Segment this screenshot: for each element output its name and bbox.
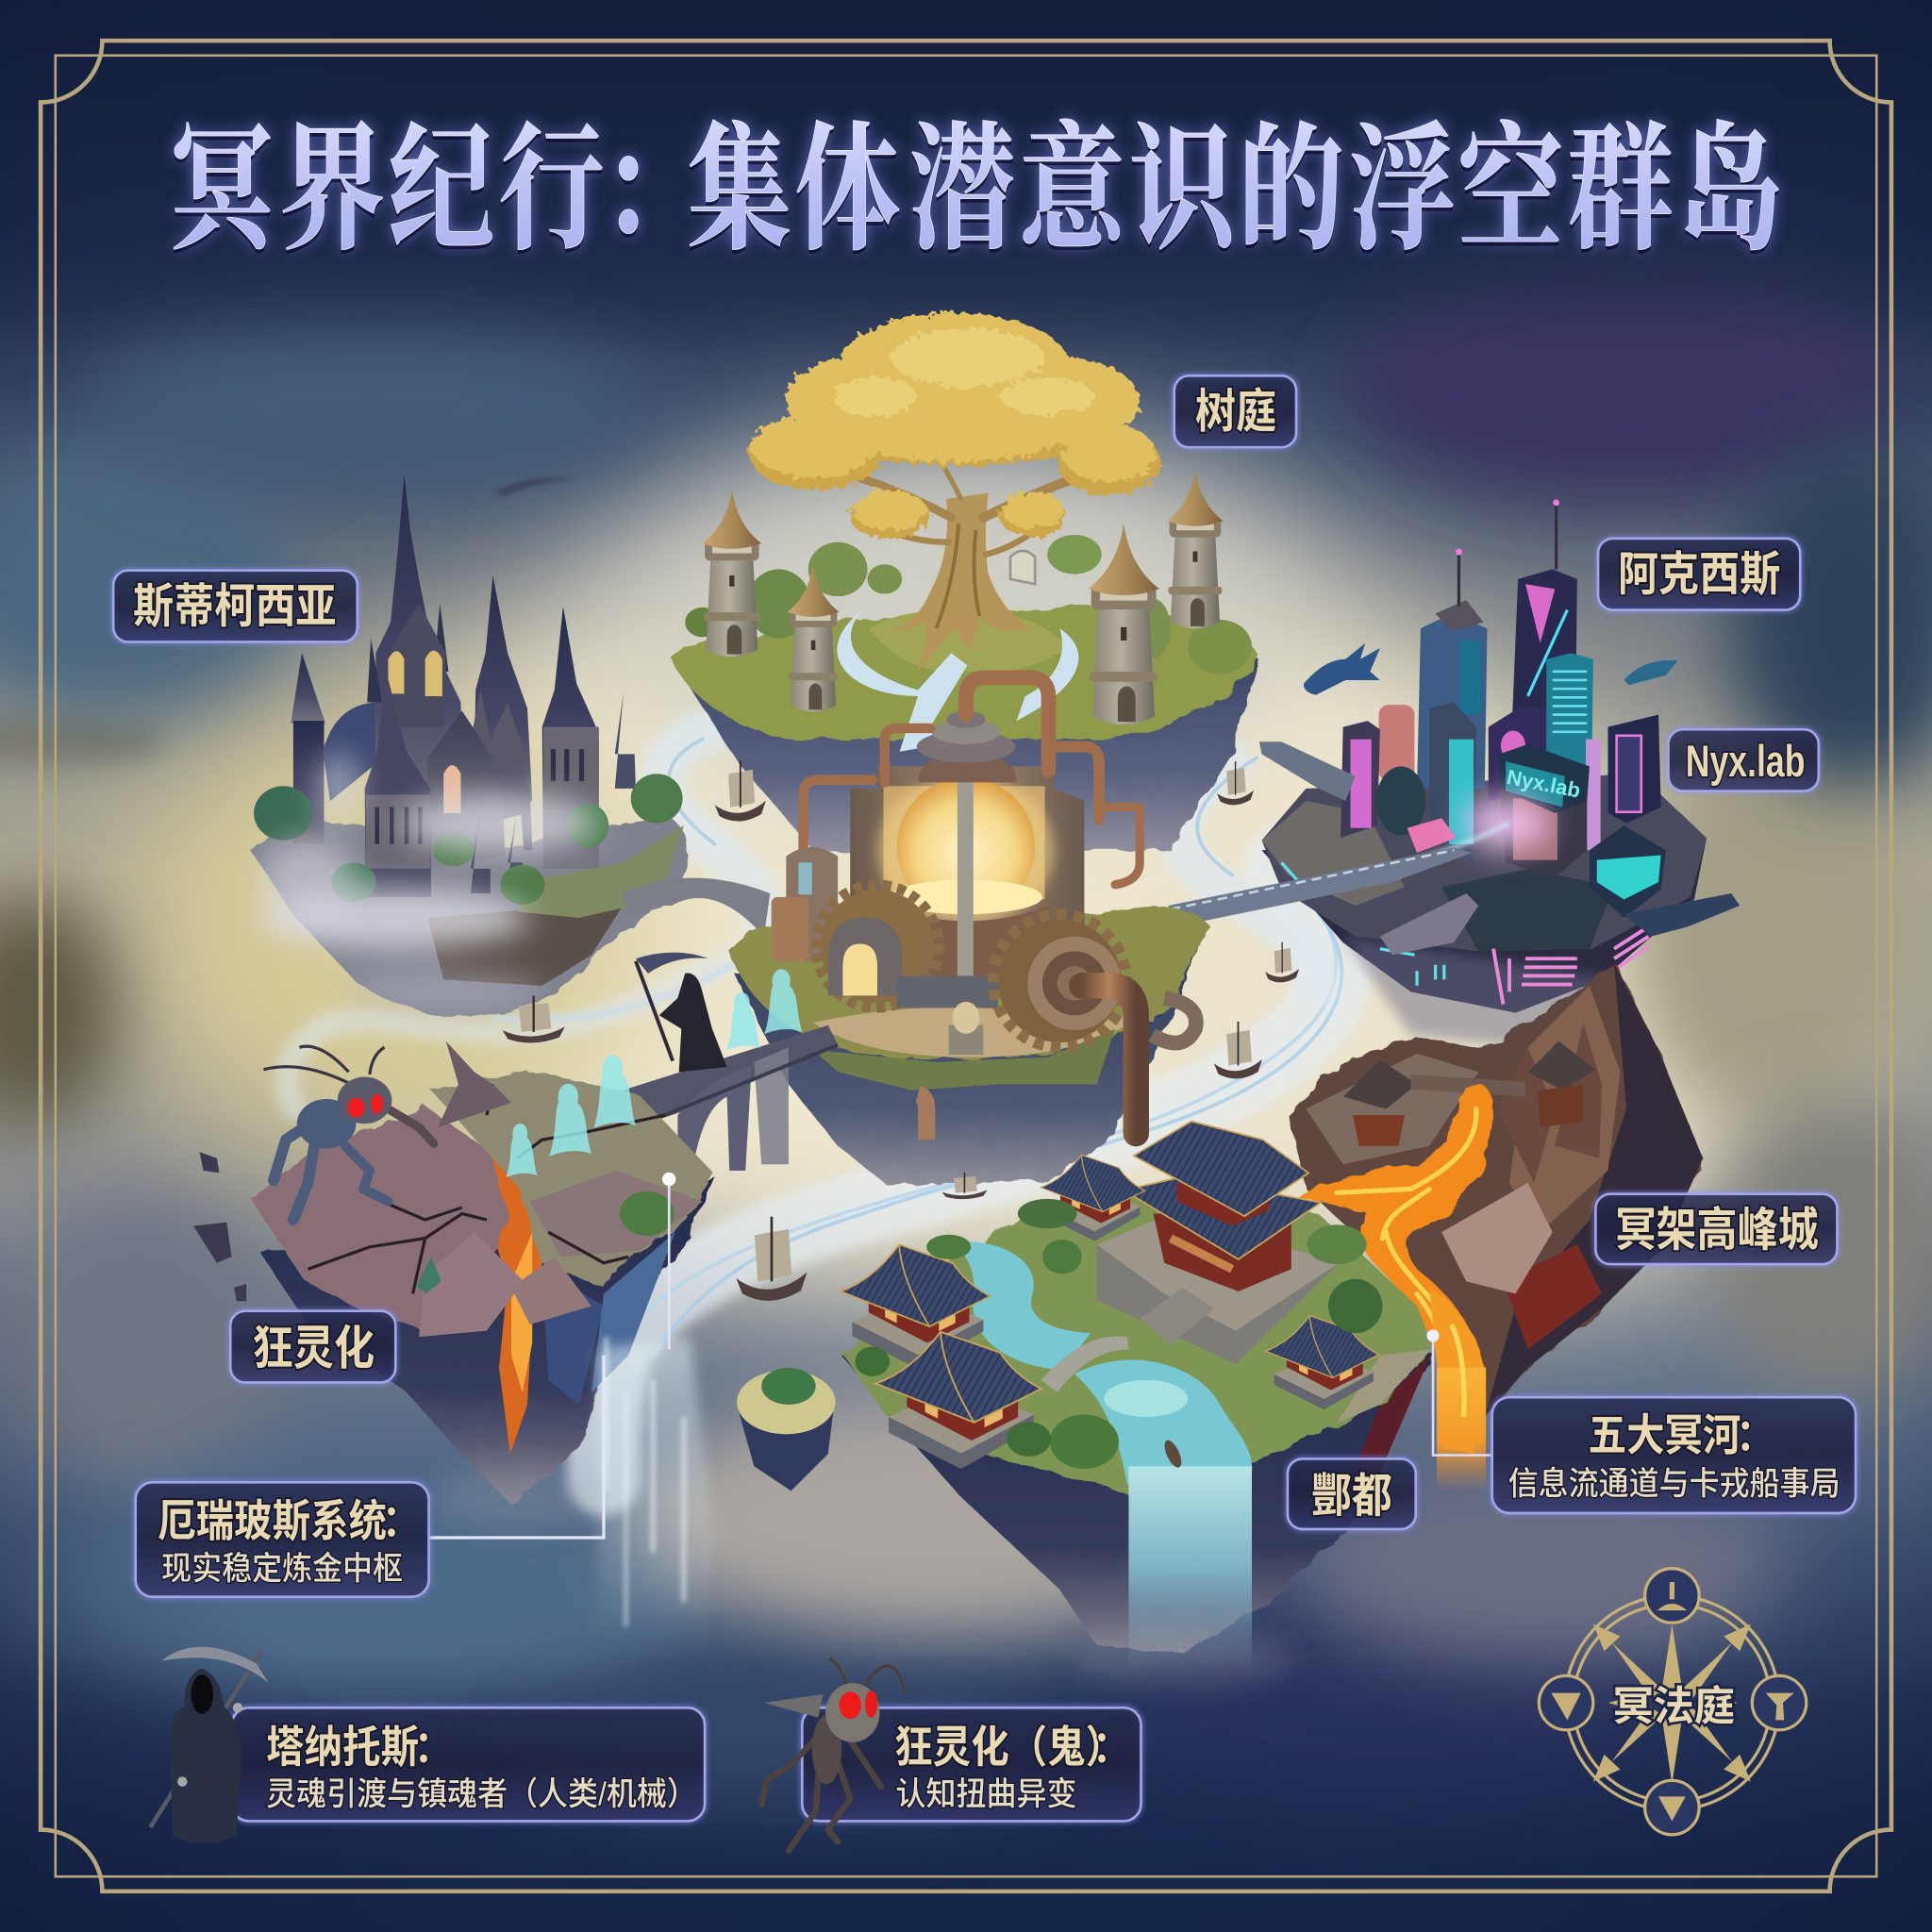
- curled side pipe: [1152, 998, 1196, 1043]
- left round tower: [291, 653, 325, 844]
- main cathedral spire: [367, 475, 463, 838]
- icon: ghost creature: [761, 1658, 906, 1851]
- left cracked slab: [250, 1107, 508, 1331]
- label: Nyx.lab: Nyx.lab: [1686, 736, 1805, 786]
- label: peak city: 冥架高峰城: [1615, 1204, 1819, 1256]
- right neon tower: [1607, 715, 1661, 823]
- golden tree trunk: [850, 425, 1084, 672]
- small far spire: [615, 692, 636, 789]
- island: tree court: [669, 313, 1259, 850]
- stone bridge between Stygia and the machine: [623, 878, 770, 937]
- pink column: [1341, 721, 1380, 838]
- tallest tower: [1509, 500, 1577, 789]
- stygia trees: [254, 774, 683, 905]
- upper walls: [1176, 1183, 1269, 1226]
- paths and bridge: [1041, 1336, 1128, 1392]
- callout: five rivers: 信息流通道与卡戎船事局: [1508, 1466, 1840, 1503]
- emblem: underworld court compass: 冥法庭: [1613, 1684, 1735, 1729]
- right fortress pagoda: [1528, 1041, 1595, 1127]
- stygia fog: [258, 754, 597, 1014]
- small pipe under island: [918, 1094, 926, 1140]
- towers: [702, 470, 1224, 724]
- waterfall: [1128, 1466, 1252, 1670]
- large outflow pipe: [1082, 986, 1136, 1134]
- label: Stygia: 斯蒂柯西亚: [133, 580, 337, 632]
- crazed spirit creature: [264, 1046, 434, 1220]
- cyan cube: [1590, 825, 1666, 918]
- rivers of information: [287, 727, 1341, 1478]
- vertical strut: [958, 778, 974, 983]
- Fengdu greenery: [855, 1199, 1382, 1469]
- jade shard: [416, 1257, 441, 1293]
- cyan dark drum: [1376, 766, 1425, 836]
- island: cracked land: [193, 1041, 715, 1506]
- dome stack: [917, 711, 1017, 782]
- legend: frenzy ghost: 狂灵化（鬼）：: [894, 1710, 1130, 1775]
- label: peak city: [1595, 1194, 1837, 1264]
- left cylinders: [772, 847, 838, 961]
- machine drum: [877, 906, 1059, 991]
- island: Fengdu: [841, 1122, 1486, 1670]
- copper pipes: [804, 677, 1140, 885]
- label: Stygia: [113, 571, 358, 641]
- bridge to the machine: [1168, 848, 1473, 926]
- lower roof: [1124, 1176, 1321, 1259]
- island: central alchemy machine: [729, 677, 1210, 1185]
- souls walking: [507, 1056, 636, 1177]
- left gear and arch: [816, 885, 939, 1008]
- cliff lava vein: [487, 1140, 548, 1454]
- teal sign tower: [1429, 702, 1476, 862]
- nave gable: [425, 711, 506, 869]
- right cracked slab: [431, 1070, 711, 1288]
- cracks: [308, 1084, 665, 1293]
- legend: frenzy ghost: 认知扭曲异变: [896, 1776, 1077, 1813]
- label: Fengdu: 酆都: [1311, 1470, 1392, 1522]
- callout: Erebus: [136, 1482, 429, 1597]
- golden canopy: [749, 313, 1160, 539]
- boats on the rivers: [503, 760, 1299, 1301]
- leader line: Erebus: [429, 1173, 675, 1538]
- upper roof: [1134, 1122, 1308, 1216]
- label: Axis: [1598, 539, 1800, 610]
- pagodas: [841, 1155, 1379, 1469]
- flying buttress: [488, 752, 532, 850]
- label: Nyx.lab: [1668, 729, 1819, 791]
- label: tree court: 树庭: [1195, 385, 1276, 438]
- island: Stygia gothic castle: [253, 475, 689, 1017]
- blue skyscraper: [1417, 549, 1487, 789]
- fortress bridge: [1411, 1074, 1525, 1096]
- island: Axis cyber city: [1259, 500, 1740, 1047]
- left fortress pagoda: [1343, 1059, 1417, 1146]
- cathedral windows: [388, 651, 442, 696]
- floating rocks: [193, 1152, 246, 1301]
- base stone: [897, 975, 998, 1008]
- dome: [323, 702, 375, 801]
- fog under islands: [431, 1465, 1293, 1684]
- souls on the bridge: [727, 969, 802, 1050]
- legend: Thanatos: 塔纳托斯：: [266, 1710, 452, 1775]
- neon beam: [1356, 823, 1509, 874]
- alchemy frame: [850, 766, 1084, 961]
- spirit bridge: [623, 1025, 838, 1171]
- callout: five rivers: 五大冥河：: [1589, 1399, 1774, 1463]
- label: frenzy: [230, 1311, 395, 1382]
- cascade from the river: [597, 1337, 850, 1651]
- legend: frenzy ghost: [802, 1707, 1141, 1821]
- crystal post: [949, 1002, 983, 1055]
- rock statue: [438, 1041, 511, 1127]
- hull neon stripes: [1493, 926, 1649, 1004]
- callout: five rivers: [1492, 1397, 1856, 1513]
- Nyx.lab building: [1500, 744, 1590, 877]
- legend: Thanatos: [232, 1707, 705, 1821]
- icon: reaper: [150, 1647, 269, 1843]
- Nyx.lab building: Nyx.lab: [1505, 765, 1582, 803]
- ponds: [955, 1241, 1252, 1485]
- mountain fortress island: [1288, 963, 1703, 1441]
- moss patch: [620, 1191, 674, 1236]
- rear spire: [474, 575, 532, 825]
- floating ships: [1304, 643, 1678, 695]
- reaper on the bridge: [636, 953, 727, 1072]
- title: 冥界纪行：集体潜意识的浮空群岛: [169, 79, 1783, 277]
- callout: Erebus: 厄瑞玻斯系统：: [158, 1485, 420, 1550]
- glowing orb: [877, 776, 1055, 924]
- leader line: five rivers: [1426, 1329, 1493, 1456]
- label: frenzy: 狂灵化: [253, 1322, 375, 1374]
- right gear: [993, 914, 1126, 1047]
- left wing: [1259, 741, 1356, 801]
- striped cylinder: [1379, 705, 1414, 781]
- small trees: [685, 535, 1252, 674]
- small boat: [1161, 1438, 1185, 1470]
- main temple walls: [1154, 1214, 1291, 1291]
- cyan tower: [1546, 653, 1593, 850]
- small floating island: [737, 1368, 836, 1491]
- front tower: [365, 674, 431, 897]
- label: Axis: 阿克西斯: [1618, 548, 1780, 600]
- centre energy glow: [1464, 796, 1547, 850]
- lava overflow: [1429, 1288, 1486, 1491]
- portal: [1010, 551, 1035, 584]
- main temple terrace: [1096, 1214, 1340, 1364]
- label: tree court: [1174, 375, 1296, 447]
- lava river: [1293, 1084, 1493, 1441]
- label: Fengdu: [1288, 1458, 1416, 1529]
- pink cube: [1407, 818, 1457, 853]
- right bell tower: [542, 607, 599, 869]
- emblem: underworld court compass: [1539, 1569, 1807, 1835]
- lower city gun ship: [1380, 893, 1478, 955]
- violet sign block: [1489, 708, 1555, 801]
- right wing: [1624, 893, 1740, 937]
- small spires: [471, 808, 525, 893]
- callout: Erebus: 现实稳定炼金中枢: [161, 1551, 403, 1588]
- stream: [837, 610, 1078, 752]
- legend: Thanatos: 灵魂引渡与镇魂者（人类/机械）: [266, 1776, 697, 1813]
